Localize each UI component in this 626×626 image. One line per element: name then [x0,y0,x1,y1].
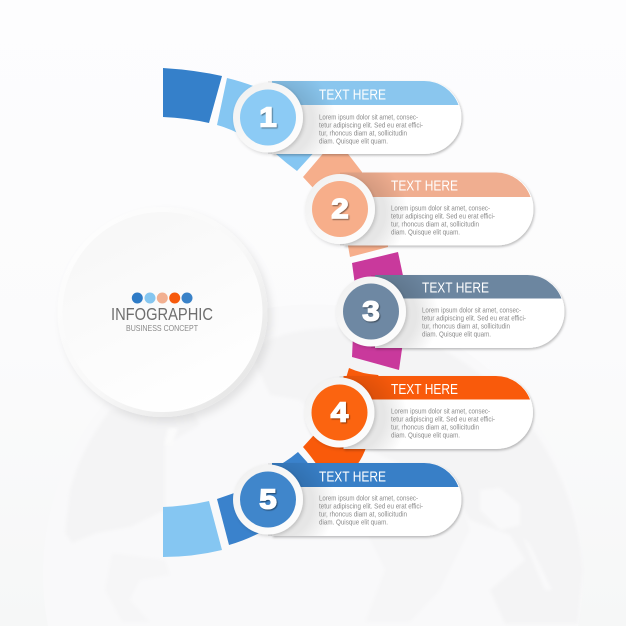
card 2 [305,172,536,248]
number: 3 [362,296,380,327]
header band [344,172,530,197]
circle shade [340,376,400,449]
description: diam. Quisque elit quam. [422,331,491,338]
circle shade [371,275,432,348]
arc segment: salmon [303,150,362,195]
description [422,307,526,338]
description: tur, rhoncus diam at, sollicitudin [319,130,407,137]
number disc [240,472,296,528]
arc segment: light blue top [217,78,256,134]
center subtitle: BUSINESS CONCEPT [126,323,198,333]
description: tetur adipiscing elit. Sed eu erat effici- [391,416,495,423]
number disc [312,384,368,440]
heading: TEXT HERE [319,468,386,486]
description [319,495,423,526]
number ring [233,82,303,152]
heading: TEXT HERE [319,86,386,104]
arc segment: dark blue top [163,68,222,123]
number: 5 [259,484,277,515]
inner disc [62,212,262,412]
description: Lorem ipsum dolor sit amet, consec- [422,307,521,314]
arc segment: dark blue bottom [217,491,265,545]
arc segment: blue upper [270,452,312,470]
arc segment: salmon lower [347,240,388,257]
description: tur, rhoncus diam at, sollicitudin [391,424,479,431]
arc segment: magenta lower [352,335,404,370]
number ring [304,378,374,448]
world globe watermark [43,304,583,626]
header band [344,376,530,400]
outer ring [58,207,268,417]
description: tur, rhoncus diam at, sollicitudin [319,511,407,518]
number disc [240,90,296,146]
arc segment: orange lower [303,430,367,465]
number: 1 [259,102,277,133]
description: Lorem ipsum dolor sit amet, consec- [391,205,490,212]
card 5 [233,463,464,539]
arc segment: magenta top [352,252,405,285]
header band [375,275,562,298]
heading: TEXT HERE [422,280,489,296]
card body [272,463,462,536]
number ring [305,174,375,244]
description: tur, rhoncus diam at, sollicitudin [422,323,510,330]
number ring [233,464,303,534]
card body [344,172,534,246]
card body [344,376,533,449]
heading: TEXT HERE [391,178,458,194]
description: tetur adipiscing elit. Sed eu erat effici- [422,315,526,322]
description [391,408,495,439]
central circle [58,207,268,417]
description: Lorem ipsum dolor sit amet, consec- [319,114,418,121]
number disc [343,284,399,340]
number: 2 [331,194,349,225]
description: tetur adipiscing elit. Sed eu erat effici- [319,122,423,129]
arc segment: orange top [344,368,385,385]
card 3 [337,275,567,351]
description: diam. Quisque elit quam. [391,229,460,236]
number: 4 [331,397,349,428]
arc segment: light blue bottom [163,501,222,557]
card 4 [306,376,536,452]
description: diam. Quisque elit quam. [319,519,388,526]
description [319,114,423,145]
header band [272,81,458,105]
heading: TEXT HERE [391,381,458,398]
colored dots [132,292,192,304]
circle shade [268,463,328,536]
header band [272,463,458,487]
arc segment: light blue lower [270,148,318,171]
description [391,205,495,236]
center title: INFOGRAPHIC [111,304,213,324]
description: Lorem ipsum dolor sit amet, consec- [319,495,418,502]
card body [375,275,564,348]
card body [272,81,462,154]
description: Lorem ipsum dolor sit amet, consec- [391,408,490,415]
description: diam. Quisque elit quam. [319,138,388,145]
description: tur, rhoncus diam at, sollicitudin [391,221,479,228]
description: diam. Quisque elit quam. [391,432,460,439]
circle shade [340,172,400,246]
circle shade [268,81,328,154]
description: tetur adipiscing elit. Sed eu erat effici- [319,503,423,510]
number ring [336,276,406,346]
description: tetur adipiscing elit. Sed eu erat effici- [391,213,495,220]
card 1 [233,81,464,157]
number disc [312,181,368,237]
